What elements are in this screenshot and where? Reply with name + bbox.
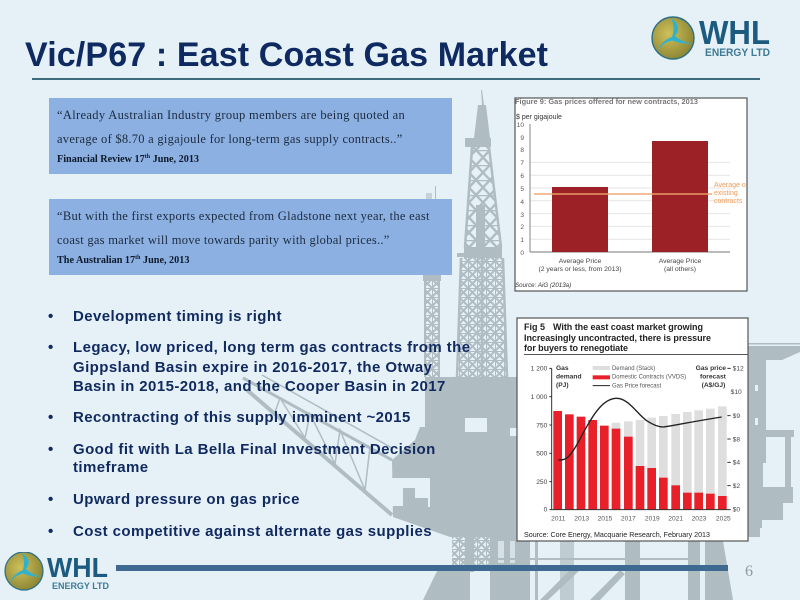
chart: east coast gas demand and price forecast: 2021 bbox=[668, 516, 683, 523]
bullet list: Cost competitive against alternate gas supplies bbox=[73, 523, 432, 540]
page number: 6 bbox=[745, 563, 753, 580]
chart: east coast gas demand and price forecast: 2017 bbox=[621, 516, 636, 523]
chart: gas prices offered for new contracts: $ per gigajoule bbox=[516, 114, 562, 121]
chart: gas prices offered for new contracts: 10 bbox=[517, 122, 524, 129]
chart: gas prices offered for new contracts: 1 bbox=[520, 237, 524, 244]
bullet list: • bbox=[48, 308, 53, 325]
chart: gas prices offered for new contracts: 0 bbox=[520, 250, 524, 257]
chart: east coast gas demand and price forecast: 1 200 bbox=[531, 366, 548, 373]
chart: east coast gas demand and price forecast: $0 bbox=[733, 507, 740, 514]
boom bbox=[243, 375, 392, 515]
chart: gas prices offered for new contracts: 5 bbox=[520, 186, 524, 193]
chart: east coast gas demand and price forecast: Fig 5 bbox=[524, 322, 545, 332]
bullet list: Recontracting of this supply imminent ~2015 bbox=[73, 409, 411, 426]
chart: east coast gas demand and price forecast: Gas price bbox=[696, 365, 726, 372]
quote box: The Australian: coast gas market will move towards parity with global prices..” bbox=[57, 233, 390, 247]
bullet list: Legacy, low priced, long term gas contracts from the bbox=[73, 339, 470, 356]
quote box: The Australian bbox=[49, 199, 452, 275]
chart: east coast gas demand and price forecast bbox=[516, 317, 749, 542]
bullet list: Good fit with La Bella Final Investment Decision bbox=[73, 441, 436, 458]
logo: top right bbox=[651, 14, 770, 60]
bullet list: • bbox=[48, 339, 53, 356]
chart: gas prices offered for new contracts: Average Price bbox=[659, 258, 701, 265]
chart: gas prices offered for new contracts: 6 bbox=[520, 173, 524, 180]
logo: bottom left bbox=[4, 552, 109, 591]
chart: gas prices offered for new contracts: 2 bbox=[520, 224, 524, 231]
chart: east coast gas demand and price forecast: $10 bbox=[731, 389, 742, 396]
bullet list: • bbox=[48, 523, 53, 540]
chart: east coast gas demand and price forecast: $8 bbox=[733, 436, 740, 443]
quote box: The Australian: “But with the first exports expected from Gladstone next year, the east bbox=[57, 209, 430, 223]
bullet list: Upward pressure on gas price bbox=[73, 491, 300, 508]
legs bbox=[423, 565, 470, 600]
bullet list: • bbox=[48, 409, 53, 426]
chart: gas prices offered for new contracts: Figure 9: Gas prices offered for new contracts, 2013 bbox=[515, 97, 698, 106]
chart: east coast gas demand and price forecast: (A$/GJ) bbox=[702, 382, 725, 389]
chart: east coast gas demand and price forecast: 2015 bbox=[598, 516, 613, 523]
chart: east coast gas demand and price forecast: $4 bbox=[733, 460, 740, 467]
logo: top right: WHL bbox=[699, 14, 770, 51]
gray demand bars bbox=[612, 406, 727, 510]
logo: bottom left: ENERGY LTD bbox=[52, 581, 109, 591]
chart: gas prices offered for new contracts: 7 bbox=[520, 160, 524, 167]
chart: east coast gas demand and price forecast: $9 bbox=[733, 413, 740, 420]
chart: east coast gas demand and price forecast: Domestic Contracts (VVDS) bbox=[612, 375, 686, 381]
quote box: Financial Review: “Already Australian Industry group members are being quoted an bbox=[57, 108, 405, 122]
chart: gas prices offered for new contracts: Average Price bbox=[559, 258, 601, 265]
quote box: Financial Review: Financial Review 17th June, 2013 bbox=[57, 154, 199, 165]
chart: east coast gas demand and price forecast: $2 bbox=[733, 483, 740, 490]
chart: east coast gas demand and price forecast: Increasingly uncontracted, there is pressure bbox=[524, 333, 711, 343]
antenna bbox=[435, 186, 436, 199]
red contract bars bbox=[553, 411, 727, 510]
bullet list: Basin in 2015-2018, and the Cooper Basin in 2017 bbox=[73, 378, 446, 395]
chart: gas prices offered for new contracts: (2 years or less, from 2013) bbox=[538, 266, 622, 273]
bullet list: • bbox=[48, 491, 53, 508]
chart: east coast gas demand and price forecast: Source: Core Energy, Macquarie Research, February 2013 bbox=[524, 530, 710, 539]
chart: east coast gas demand and price forecast: 500 bbox=[536, 451, 548, 458]
chart: east coast gas demand and price forecast: 2025 bbox=[716, 516, 731, 523]
chart: east coast gas demand and price forecast: With the east coast market growing bbox=[553, 322, 703, 332]
chart: east coast gas demand and price forecast: 2023 bbox=[692, 516, 707, 523]
chart: east coast gas demand and price forecast: Gas Price forecast bbox=[612, 383, 662, 389]
chart: gas prices offered for new contracts: Source: AiG (2013a) bbox=[515, 282, 571, 289]
bullet list bbox=[48, 308, 470, 540]
chart: east coast gas demand and price forecast: 750 bbox=[536, 422, 548, 429]
chart: east coast gas demand and price forecast: for buyers to renegotiate bbox=[524, 343, 628, 353]
chart: east coast gas demand and price forecast: 2019 bbox=[645, 516, 660, 523]
bullet list: Gippsland Basin expire in 2016-2017, the Otway bbox=[73, 359, 432, 376]
chart: east coast gas demand and price forecast: 1 000 bbox=[531, 394, 548, 401]
logo: bottom left: WHL bbox=[47, 552, 108, 583]
quote box: Financial Review bbox=[49, 98, 452, 174]
derrick bbox=[474, 105, 490, 138]
chart: gas prices offered for new contracts: 4 bbox=[520, 199, 524, 206]
bullet list: Development timing is right bbox=[73, 308, 282, 325]
chart: east coast gas demand and price forecast: Gas bbox=[556, 365, 569, 372]
chart: gas prices offered for new contracts bbox=[514, 97, 748, 292]
chart: east coast gas demand and price forecast: 0 bbox=[544, 507, 548, 514]
chart: gas prices offered for new contracts: contracts bbox=[714, 198, 743, 205]
right structure bbox=[748, 343, 800, 344]
quote box: Financial Review: average of $8.70 a gigajoule for long-term gas supply contracts..” bbox=[57, 132, 403, 146]
deck and hull bbox=[392, 377, 760, 537]
chart: gas prices offered for new contracts: existing bbox=[714, 190, 738, 197]
title: Vic/P67 : East Coast Gas Market bbox=[25, 36, 548, 74]
footer bar bbox=[116, 565, 728, 571]
chart: east coast gas demand and price forecast: demand bbox=[556, 374, 582, 381]
logo: top right: ENERGY LTD bbox=[705, 47, 770, 59]
chart: gas prices offered for new contracts: 3 bbox=[520, 212, 524, 219]
quote box: The Australian: The Australian 17th June, 2013 bbox=[57, 255, 189, 266]
title rule bbox=[32, 78, 760, 80]
chart: gas prices offered for new contracts: (all others) bbox=[664, 266, 696, 273]
chart: gas prices offered for new contracts: 8 bbox=[520, 147, 524, 154]
chart: gas prices offered for new contracts: Average o bbox=[714, 182, 746, 189]
chart: east coast gas demand and price forecast: 2013 bbox=[574, 516, 589, 523]
chart: east coast gas demand and price forecast: 2011 bbox=[551, 516, 566, 523]
chart: gas prices offered for new contracts: 9 bbox=[520, 135, 524, 142]
bullet list: • bbox=[48, 441, 53, 458]
chart: east coast gas demand and price forecast: 250 bbox=[536, 479, 548, 486]
chart: east coast gas demand and price forecast: forecast bbox=[700, 374, 727, 381]
bullet list: timeframe bbox=[73, 459, 148, 476]
lattice tower bbox=[423, 275, 441, 281]
chart: east coast gas demand and price forecast: $12 bbox=[733, 366, 744, 373]
chart: east coast gas demand and price forecast: Demand (Stack) bbox=[612, 366, 655, 372]
chart: east coast gas demand and price forecast: (PJ) bbox=[556, 382, 569, 389]
